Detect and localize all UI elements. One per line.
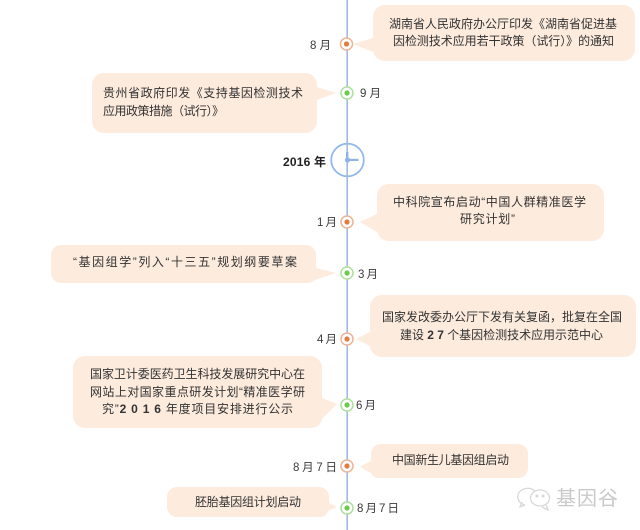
node marker bbox=[341, 87, 353, 99]
event: 2016 August 7, newborn genome bbox=[293, 444, 528, 478]
event: 2015 August, Hunan bbox=[310, 5, 635, 61]
watermark text: 基因谷 bbox=[556, 487, 618, 510]
year label: 2016 年 bbox=[283, 154, 326, 169]
callout text: 中国新生儿基因组启动 bbox=[392, 452, 509, 467]
callout bubble bbox=[353, 5, 635, 61]
event: 2016 March, 13th Five-Year Plan bbox=[51, 245, 378, 283]
callout text: 国家卫计委医药卫生科技发展研究中心在 bbox=[90, 366, 305, 381]
node marker bbox=[341, 399, 353, 411]
callout bubble bbox=[92, 73, 336, 133]
date label: 8 月 bbox=[310, 40, 331, 52]
date label: 3 月 bbox=[358, 269, 378, 281]
callout text: 湖南省人民政府办公厅印发《湖南省促进基 bbox=[389, 16, 617, 31]
callout text: 贵州省政府印发《支持基因检测技术 bbox=[103, 85, 303, 100]
callout bubble bbox=[167, 487, 337, 517]
callout bubble bbox=[356, 295, 636, 357]
date label: 8 月 7 日 bbox=[293, 462, 337, 474]
node marker bbox=[341, 267, 353, 279]
callout text: 应用政策措施（试行）》 bbox=[103, 103, 224, 118]
date label: 9 月 bbox=[360, 88, 381, 100]
callout text: “基因组学”列入“十三五”规划纲要草案 bbox=[73, 254, 297, 269]
callout text: 因检测技术应用若干政策（试行）》的通知 bbox=[393, 33, 614, 48]
callout text: 胚胎基因组计划启动 bbox=[195, 495, 301, 509]
date label: 8 月 7 日 bbox=[357, 503, 399, 515]
event: 2016 April, NDRC bbox=[317, 295, 636, 357]
callout bubble bbox=[73, 356, 337, 428]
icon: chat bubbles bbox=[518, 488, 550, 510]
callout bubble bbox=[360, 184, 604, 241]
node marker bbox=[341, 333, 353, 345]
node marker bbox=[340, 38, 352, 50]
callout text: 中科院宣布启动“中国人群精准医学 bbox=[393, 194, 586, 209]
callout text: 究”2 0 1 6 年度项目安排进行公示 bbox=[102, 402, 293, 416]
event: 2016 August 7, embryo genome bbox=[167, 487, 399, 517]
callout bubble bbox=[51, 245, 336, 283]
callout bubble bbox=[360, 444, 528, 478]
callout text: 建设 2 7 个基因检测技术应用示范中心 bbox=[400, 328, 603, 342]
timeline axis bbox=[346, 0, 348, 530]
node marker bbox=[341, 460, 353, 472]
date label: 6 月 bbox=[356, 400, 376, 412]
node marker bbox=[341, 502, 353, 514]
event: 2015 September, Guizhou bbox=[92, 73, 381, 133]
clock icon: 2016 bbox=[331, 143, 364, 177]
date label: 1 月 bbox=[317, 217, 337, 229]
event: 2016 June, NHFPC bbox=[73, 356, 376, 428]
watermark bbox=[518, 487, 618, 510]
callout text: 国家发改委办公厅下发有关复函，批复在全国 bbox=[382, 309, 622, 324]
event: 2016 January, CAS bbox=[317, 184, 604, 241]
node marker bbox=[341, 216, 353, 228]
date label: 4 月 bbox=[317, 334, 337, 346]
callout text: 研究计划” bbox=[460, 211, 515, 226]
callout text: 网站上对国家重点研发计划“精准医学研 bbox=[90, 384, 305, 399]
